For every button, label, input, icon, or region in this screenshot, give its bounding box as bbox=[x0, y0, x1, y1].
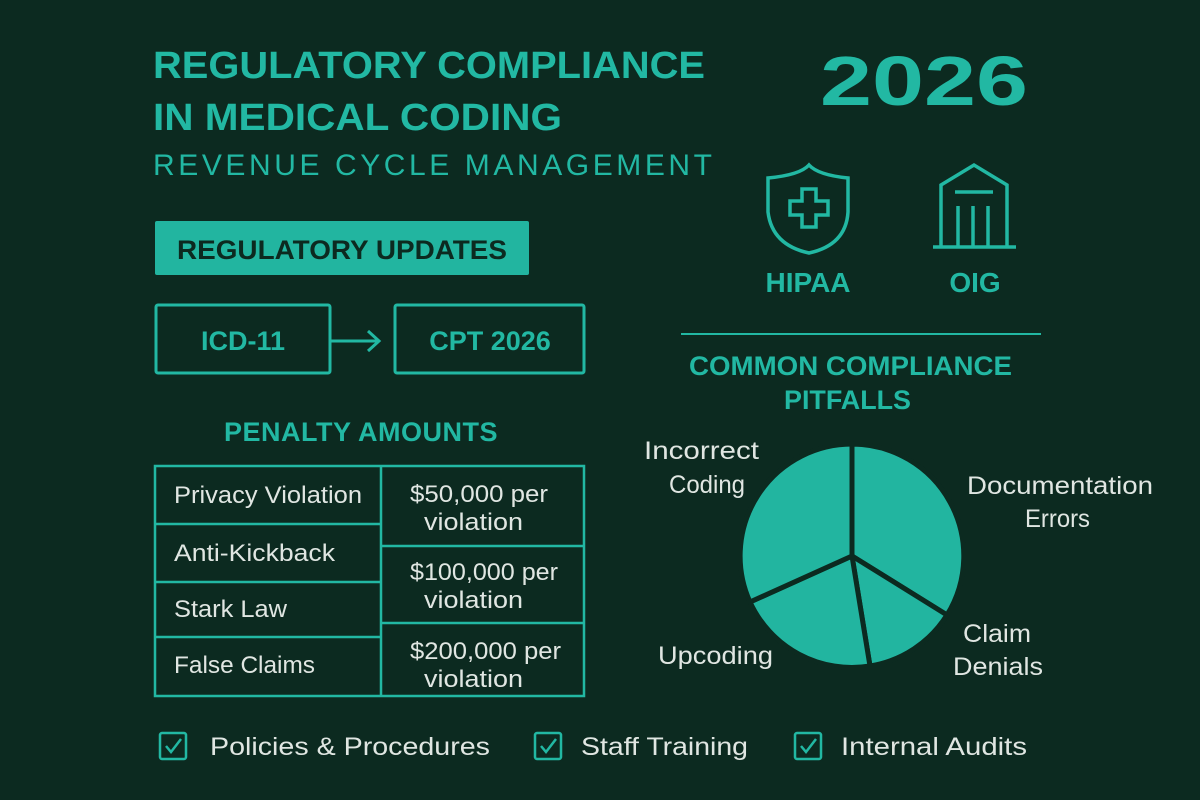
penalty table: $100,000 per bbox=[410, 559, 558, 586]
penalty table bbox=[155, 466, 584, 696]
subtitle: REVENUE CYCLE MANAGEMENT bbox=[153, 149, 712, 182]
box: CPT 2026: CPT 2026 bbox=[429, 326, 551, 356]
heading: penalty amounts: PENALTY AMOUNTS bbox=[224, 417, 498, 447]
penalty table: False Claims bbox=[174, 652, 315, 679]
pie chart bbox=[740, 444, 964, 667]
box: ICD-11: ICD-11 bbox=[201, 326, 285, 356]
penalty table: $50,000 per bbox=[410, 481, 548, 508]
title bbox=[153, 45, 705, 139]
arrow bbox=[331, 331, 379, 351]
penalty table: violation bbox=[424, 509, 523, 536]
pie labels bbox=[644, 437, 1153, 681]
box: ICD-11 bbox=[156, 305, 330, 373]
penalty table: Stark Law bbox=[174, 596, 288, 623]
penalty table: Privacy Violation bbox=[174, 482, 362, 509]
title: IN MEDICAL CODING bbox=[153, 97, 562, 139]
title: REGULATORY COMPLIANCE bbox=[153, 45, 705, 87]
pie labels: Documentation bbox=[967, 472, 1153, 500]
year: 2026 bbox=[820, 42, 1028, 120]
pie labels: Claim bbox=[963, 620, 1031, 648]
checklist: Staff Training bbox=[581, 733, 748, 761]
penalty table: violation bbox=[424, 666, 523, 693]
penalty table: Anti-Kickback bbox=[174, 540, 336, 567]
penalty table: violation bbox=[424, 587, 523, 614]
checklist: Internal Audits bbox=[841, 733, 1027, 761]
pie labels: Coding bbox=[669, 471, 745, 499]
label OIG: OIG bbox=[949, 267, 1001, 298]
pie labels: Upcoding bbox=[658, 642, 773, 670]
box: CPT 2026 bbox=[395, 305, 584, 373]
heading: common compliance pitfalls: COMMON COMPLIANCE bbox=[689, 351, 1012, 381]
heading: regulatory updates bbox=[155, 221, 529, 275]
checklist bbox=[160, 733, 1027, 761]
penalty table: $200,000 per bbox=[410, 638, 561, 665]
pie labels: Denials bbox=[953, 653, 1043, 681]
label HIPAA: HIPAA bbox=[765, 267, 851, 298]
heading: common compliance pitfalls bbox=[689, 351, 1012, 415]
checklist: Policies & Procedures bbox=[210, 733, 490, 761]
pie labels: Incorrect bbox=[644, 437, 759, 465]
icon: OIG building bbox=[933, 165, 1016, 247]
pie labels: Errors bbox=[1025, 505, 1090, 533]
heading: common compliance pitfalls: PITFALLS bbox=[784, 385, 911, 415]
icon: HIPAA shield bbox=[768, 165, 848, 253]
heading: regulatory updates: REGULATORY UPDATES bbox=[177, 235, 507, 265]
